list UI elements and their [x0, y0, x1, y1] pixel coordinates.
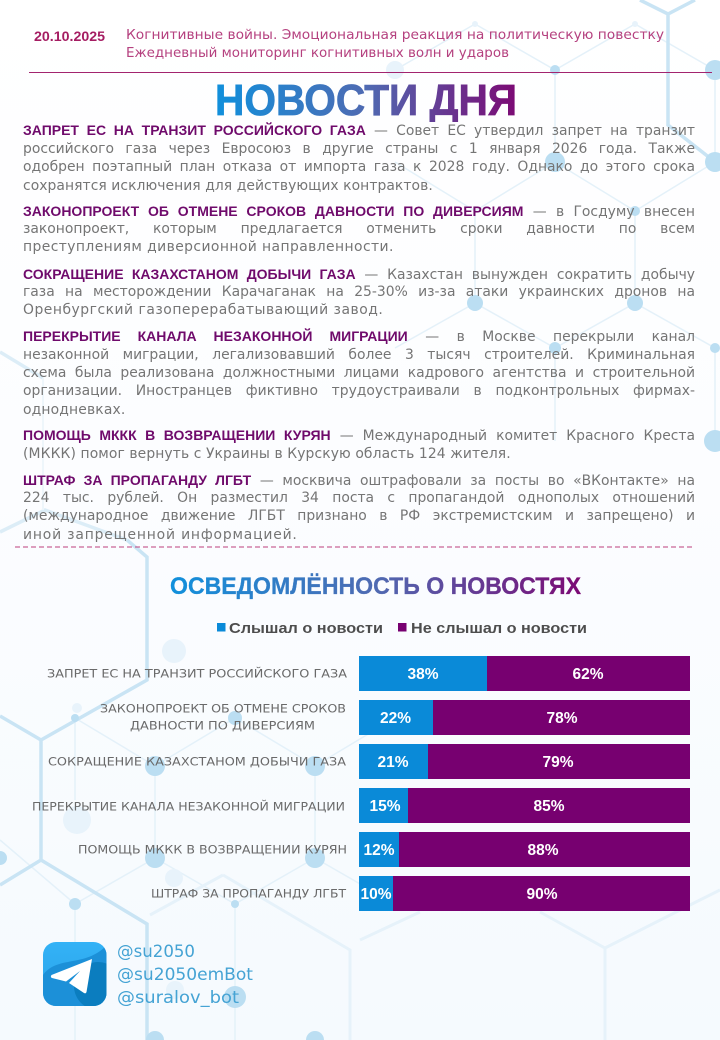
bar chart: news awareness: 21%: [377, 754, 409, 771]
telegram handles: @su2050emBot: [117, 965, 253, 985]
date: 20.10.2025: [34, 29, 105, 45]
news item: gas transit ban: одобрен поэтапный план отказа от импорта газа к 2028 году. Однако до этого срока: [23, 159, 695, 175]
telegram handles: @su2050: [117, 942, 195, 962]
bar chart: news awareness: 90%: [526, 886, 558, 903]
news item: ICRC help for Kursk residents: (МККК) помог вернуть с Украины в Курскую область 124 жителя.: [23, 446, 511, 462]
bar chart: news awareness: ПЕРЕКРЫТИЕ КАНАЛА НЕЗАКОННОЙ МИГРАЦИИ: [32, 798, 345, 814]
news item: LGBT propaganda fine: [23, 472, 695, 543]
bar chart: news awareness: 10%: [360, 886, 392, 903]
bar chart: news awareness: 85%: [533, 798, 565, 815]
news item: statute of limitations bill: [23, 203, 695, 255]
news item: illegal migration channel: организации. Иностранцев фиктивно трудоустраивали в подконтрольных фирмах-: [23, 383, 695, 399]
news item: Kazakhstan gas output: Оренбургский газоперерабатывающий завод.: [23, 302, 383, 318]
legend: Не слышал о новости: [411, 620, 587, 637]
header subtitle: Когнитивные войны. Эмоциональная реакция на политическую повестку: [126, 27, 664, 43]
bar chart: news awareness: ЗАПРЕТ ЕС НА ТРАНЗИТ РОССИЙСКОГО ГАЗА: [47, 666, 347, 680]
news item: illegal migration channel: [23, 328, 695, 418]
bar chart: news awareness: [32, 656, 690, 911]
news item: gas transit ban: [23, 122, 695, 194]
bar chart: news awareness: 12%: [363, 842, 395, 859]
news item: Kazakhstan gas output: СОКРАЩЕНИЕ КАЗАХСТАНОМ ДОБЫЧИ ГАЗА — Казахстан вынужден сократить добычу: [23, 266, 695, 283]
news item: illegal migration channel: незаконной миграции, легализовавший более 3 тысяч строителей. Криминальная: [23, 347, 695, 363]
bar chart: news awareness: ЗАКОНОПРОЕКТ ОБ ОТМЕНЕ СРОКОВ: [100, 702, 346, 716]
news item: Kazakhstan gas output: газа на месторождении Карачаганак на 25-30% из-за атаки украинских дронов на: [23, 284, 695, 300]
bar chart: news awareness: ШТРАФ ЗА ПРОПАГАНДУ ЛГБТ: [151, 886, 347, 900]
legend: [217, 620, 587, 637]
news item: Kazakhstan gas output: [23, 266, 695, 318]
bar chart: news awareness: ДАВНОСТИ ПО ДИВЕРСИЯМ: [130, 718, 315, 732]
news item: LGBT propaganda fine: ШТРАФ ЗА ПРОПАГАНДУ ЛГБТ — москвича оштрафовали за посты во «ВКонтакте» на: [23, 472, 695, 489]
bar chart: news awareness: ПОМОЩЬ МККК В ВОЗВРАЩЕНИИ КУРЯН: [78, 842, 347, 856]
bar chart: news awareness: 79%: [542, 754, 574, 771]
bar chart: news awareness: СОКРАЩЕНИЕ КАЗАХСТАНОМ ДОБЫЧИ ГАЗА: [48, 754, 346, 768]
news item: illegal migration channel: схема была реализована должностными лицами кадрового агентства и строительной: [23, 365, 695, 381]
news item: LGBT propaganda fine: (международное движение ЛГБТ признано в РФ экстремистским и запрещено) и: [23, 508, 695, 524]
news item: statute of limitations bill: законопроект, которым предлагается отменить сроки давности по всем: [23, 221, 695, 237]
telegram handles: [117, 942, 253, 1008]
news item: ICRC help for Kursk residents: ПОМОЩЬ МККК В ВОЗВРАЩЕНИИ КУРЯН — Международный комитет Красного Креста: [23, 427, 695, 444]
header subtitle: [126, 27, 664, 61]
bar chart: news awareness: 62%: [572, 666, 604, 683]
bar chart: news awareness: 22%: [380, 710, 411, 727]
bar chart: news awareness: 88%: [527, 842, 559, 859]
bar chart: news awareness: 78%: [546, 710, 578, 727]
news item: illegal migration channel: однодневках.: [23, 402, 125, 418]
telegram handles: @suralov_bot: [117, 988, 239, 1008]
icon: telegram: [43, 942, 106, 1006]
news item: LGBT propaganda fine: иной запрещенной информацией.: [23, 527, 298, 543]
news item: illegal migration channel: ПЕРЕКРЫТИЕ КАНАЛА НЕЗАКОННОЙ МИГРАЦИИ — в Москве перекрыли канал: [23, 328, 695, 345]
news item: LGBT propaganda fine: 224 тыс. рублей. Он разместил 34 поста с пропагандой однополых отношений: [23, 490, 695, 506]
header subtitle: Ежедневный мониторинг когнитивных волн и ударов: [126, 45, 509, 61]
news item: statute of limitations bill: преступлениям диверсионной направленности.: [23, 239, 394, 255]
news item: gas transit ban: сохранятся исключения для действующих контрактов.: [23, 178, 433, 194]
bar chart: news awareness: 15%: [369, 798, 401, 815]
legend: Слышал о новости: [229, 620, 383, 637]
news item: gas transit ban: российского газа через Евросоюз в другие страны с 1 января 2026 года. Также: [23, 141, 695, 157]
news item: ICRC help for Kursk residents: [23, 427, 695, 462]
news item: gas transit ban: ЗАПРЕТ ЕС НА ТРАНЗИТ РОССИЙСКОГО ГАЗА — Совет ЕС утвердил запрет на транзит: [23, 122, 695, 139]
news item: statute of limitations bill: ЗАКОНОПРОЕКТ ОБ ОТМЕНЕ СРОКОВ ДАВНОСТИ ПО ДИВЕРСИЯМ — в Госдуму внесен: [23, 203, 695, 220]
bar chart: news awareness: 38%: [407, 666, 439, 683]
